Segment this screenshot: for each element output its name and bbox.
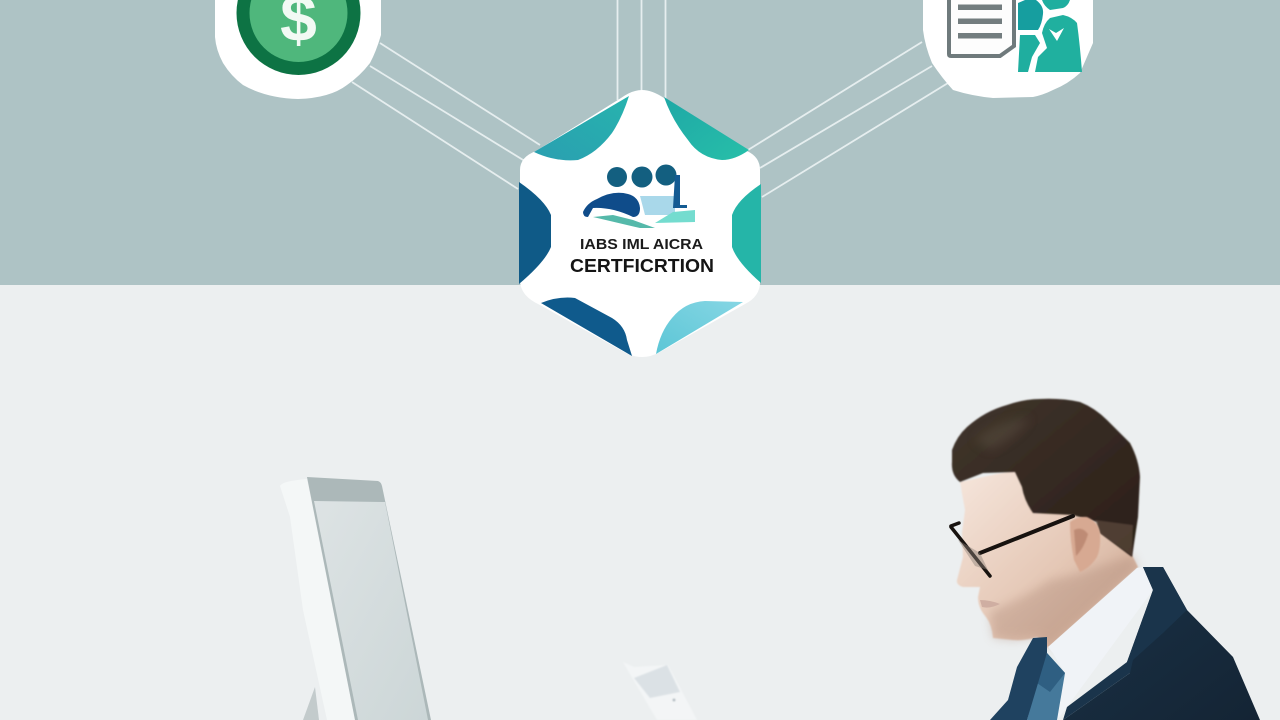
connector lines: centre group bbox=[618, 0, 666, 100]
logo: people with book bbox=[583, 164, 695, 228]
segment: left bbox=[519, 182, 551, 284]
jacket right bbox=[1063, 567, 1260, 720]
segment: top right bbox=[664, 97, 749, 160]
jacket lapel bbox=[1063, 567, 1187, 720]
hair highlight bbox=[975, 418, 1030, 450]
logo text: first line: IABS IML AICRA bbox=[580, 236, 703, 253]
hair taper by ear bbox=[1095, 520, 1133, 556]
connector lines: left group bbox=[352, 43, 540, 189]
jacket left bbox=[990, 637, 1047, 720]
segment: top left bbox=[534, 96, 629, 160]
mouth bbox=[980, 600, 1000, 608]
inner ear bbox=[1074, 529, 1088, 556]
tie bbox=[1027, 653, 1065, 720]
monitor back bbox=[280, 479, 355, 720]
icon: dollar coin bbox=[215, 0, 381, 99]
people bbox=[1018, 0, 1082, 72]
logo text: second line: CERTFICRTION bbox=[570, 256, 714, 276]
monitor bbox=[280, 477, 431, 720]
hair bbox=[952, 399, 1140, 557]
stubble and neck shading bbox=[990, 555, 1138, 648]
man in suit bbox=[951, 399, 1260, 720]
segment: bottom right bbox=[656, 301, 743, 354]
background: upper band bbox=[0, 0, 1280, 285]
document bbox=[949, 0, 1014, 56]
icon: document and people bbox=[923, 0, 1093, 98]
tie knot shading bbox=[1037, 653, 1065, 692]
background: lower band bbox=[0, 285, 1280, 720]
neck and face bbox=[957, 470, 1138, 648]
monitor stand bbox=[303, 687, 319, 720]
paper on desk bbox=[623, 662, 697, 720]
central hexagon badge bbox=[519, 90, 761, 357]
ear bbox=[1070, 517, 1100, 572]
shirt collar bbox=[1048, 567, 1153, 720]
segment: right bbox=[732, 184, 761, 283]
segment: bottom left bbox=[541, 298, 632, 356]
connector lines: right group bbox=[748, 42, 948, 197]
glasses bbox=[951, 516, 1073, 576]
monitor frame bbox=[307, 477, 431, 720]
monitor screen bbox=[314, 501, 428, 720]
